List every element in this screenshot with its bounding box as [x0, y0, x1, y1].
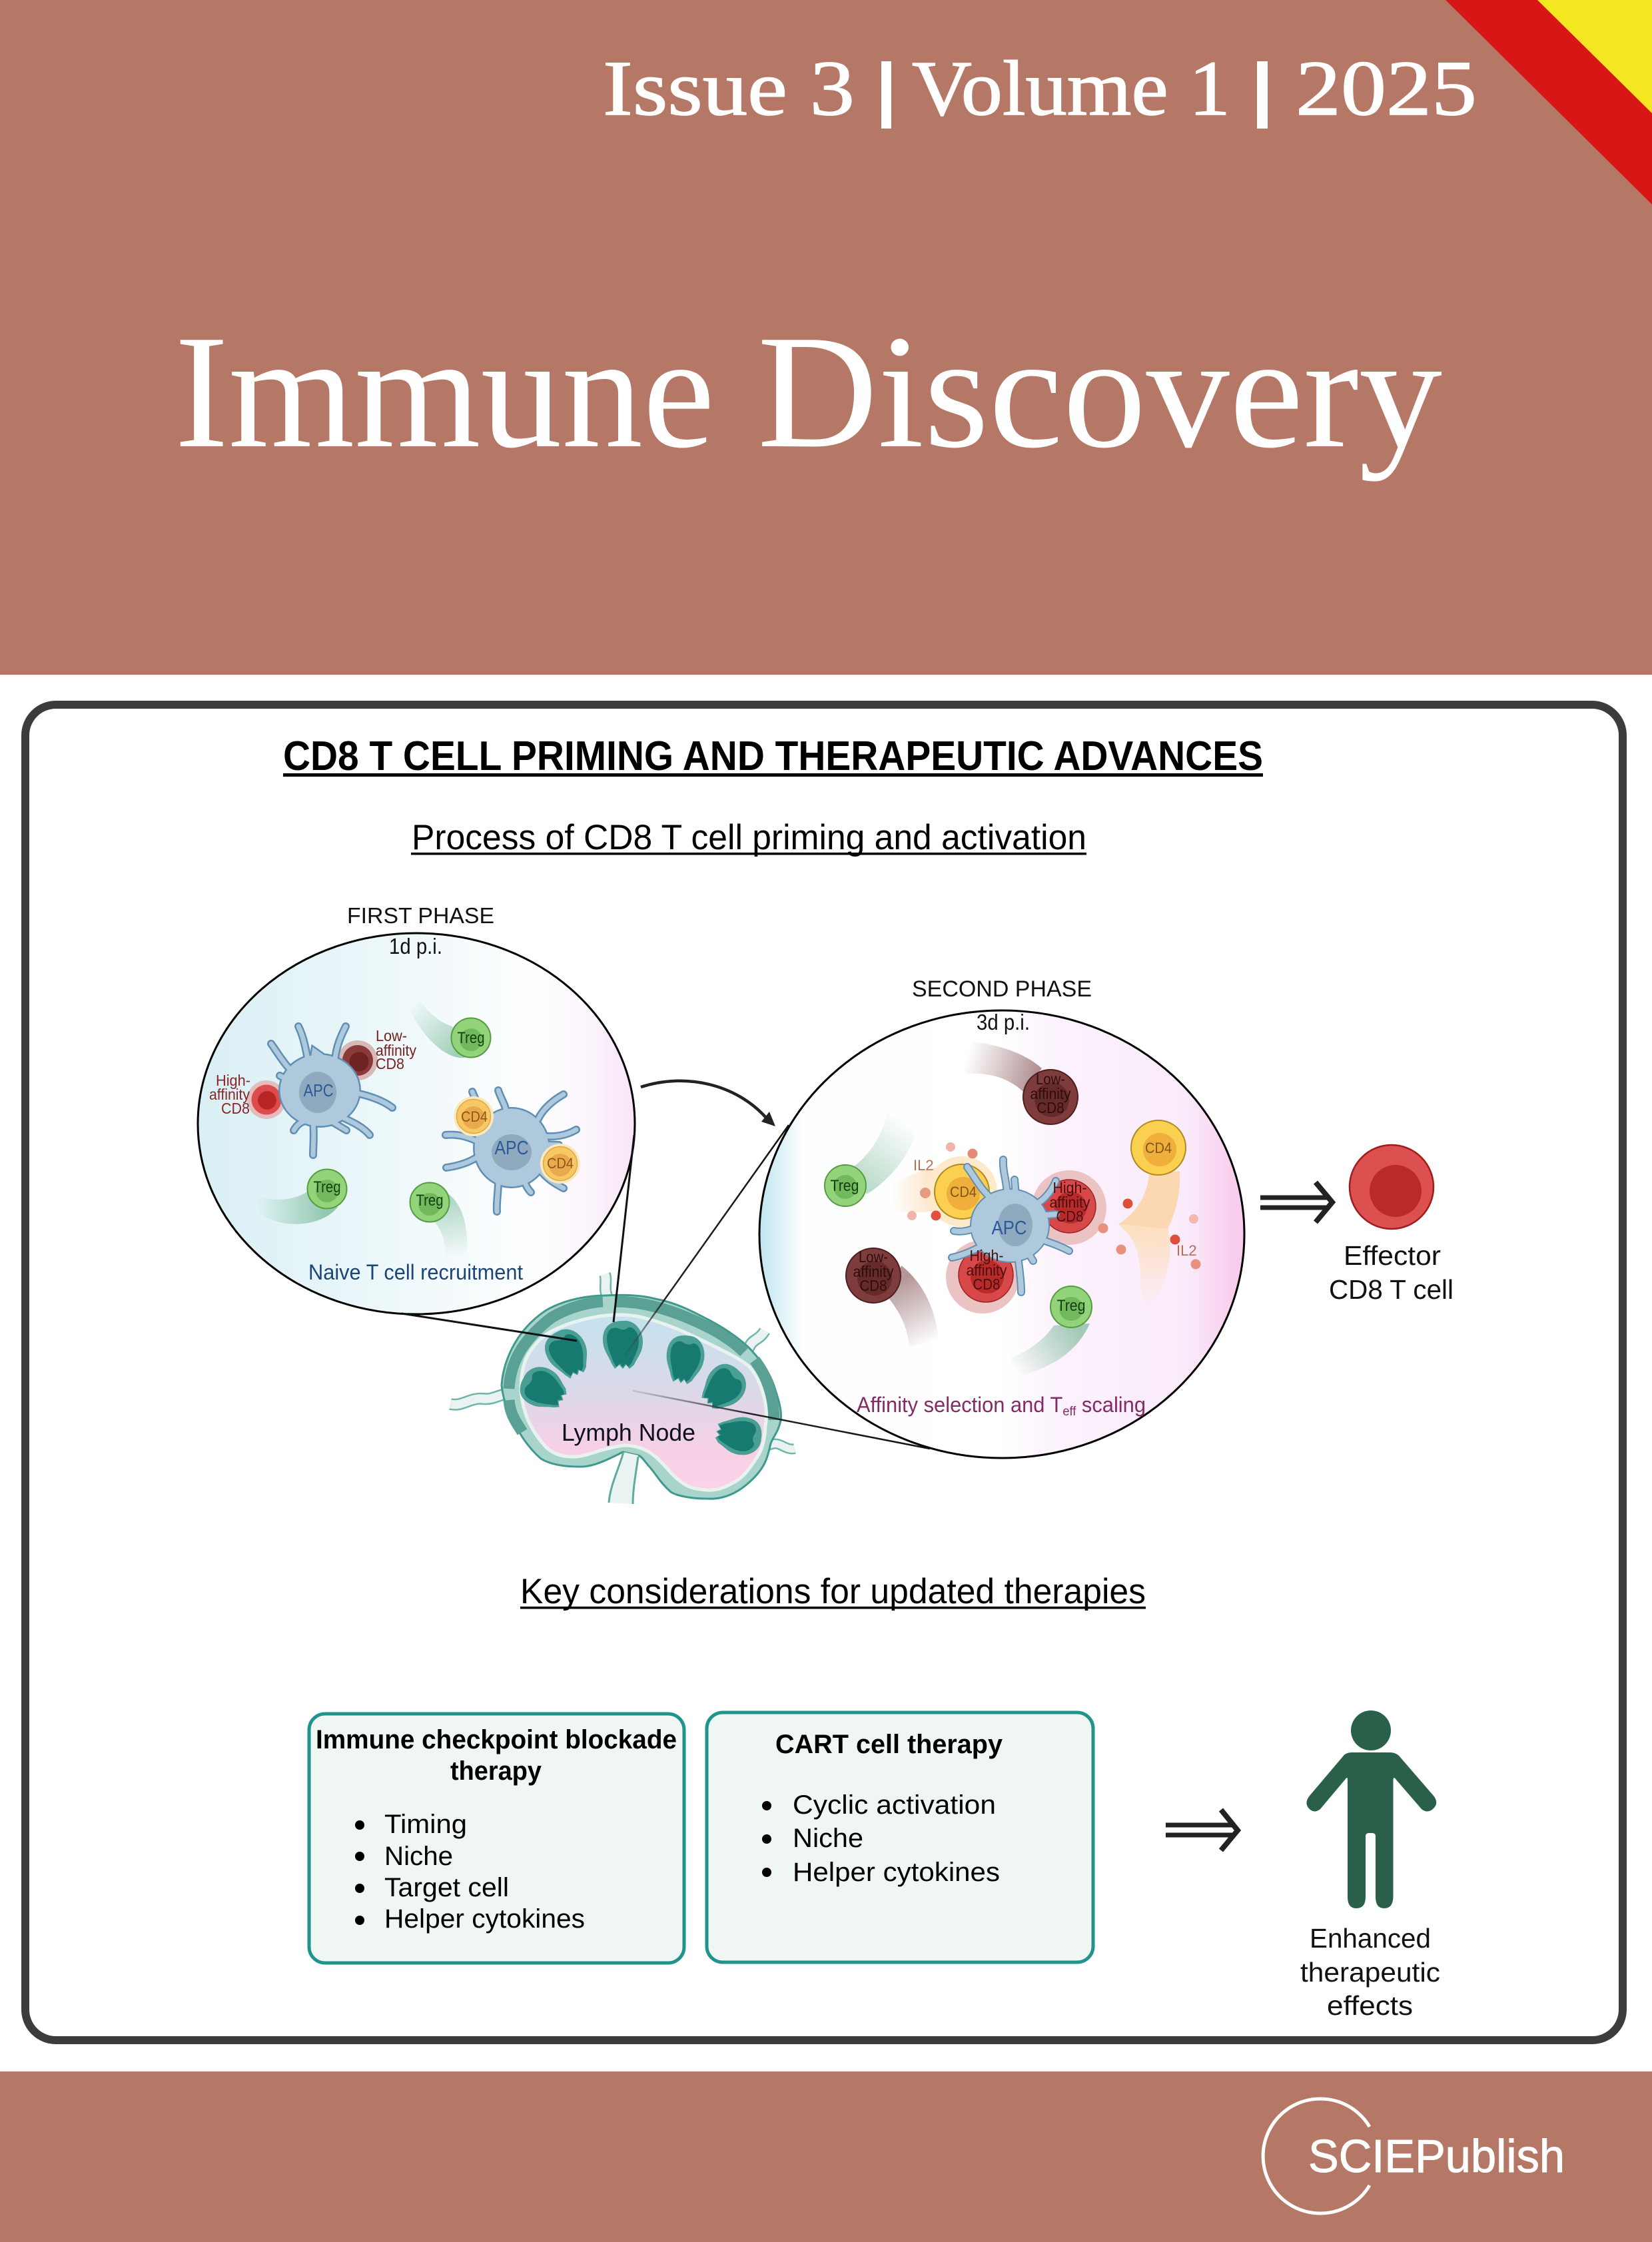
IL2 labels: IL2 — [1176, 1242, 1197, 1259]
second phase caption: scaling — [1076, 1393, 1146, 1417]
Treg cell with tail, lower centre — [410, 1183, 467, 1258]
low-affinity CD8 left: affinity — [853, 1263, 894, 1280]
APC left — [271, 1026, 392, 1155]
lymph node label: Lymph Node — [562, 1419, 695, 1446]
APC right with CD4 cells: CD4 — [461, 1108, 488, 1125]
second phase caption: eff — [1062, 1405, 1076, 1419]
issue line — [603, 45, 1477, 132]
lymph node — [450, 1274, 795, 1504]
APC right with CD4 cells: APC — [494, 1138, 529, 1159]
second phase caption: Affinity selection and T — [857, 1393, 1070, 1417]
journal title: Immune — [175, 302, 715, 482]
low-affinity label: CD8 — [376, 1055, 404, 1072]
bullet list: Target cell — [384, 1873, 509, 1902]
CD4 centre — [891, 1156, 997, 1227]
high-affinity CD8 cell — [247, 1080, 286, 1119]
IL2 labels — [913, 1157, 1197, 1259]
bullet list — [762, 1790, 1000, 1887]
high-affinity labels: High- — [1052, 1179, 1087, 1196]
capsule band — [509, 1302, 774, 1432]
medulla — [521, 1315, 766, 1490]
high-affinity label: CD8 — [221, 1100, 250, 1117]
Treg cell with tail, lower left — [255, 1170, 346, 1224]
bullet list: Niche — [793, 1824, 863, 1853]
low-affinity CD8 top — [964, 1042, 1078, 1124]
APC right with CD4 cells — [446, 1090, 580, 1212]
hilum — [609, 1452, 638, 1504]
second phase label: SECOND PHASE — [912, 976, 1092, 1002]
header band — [0, 0, 1652, 675]
high-affinity labels: CD8 — [1056, 1208, 1083, 1225]
Treg left: Treg — [830, 1177, 859, 1195]
second phase circle — [759, 976, 1244, 1458]
main heading: CD8 T CELL PRIMING AND THERAPEUTIC ADVANCES — [283, 733, 1263, 779]
footer band — [0, 2071, 1652, 2242]
bullet list: Cyclic activation — [793, 1790, 996, 1820]
lymphatic vessels — [450, 1274, 795, 1449]
follicles — [514, 1321, 765, 1458]
low-affinity label: affinity — [376, 1042, 416, 1059]
CD4 right with secretion cone: CD4 — [1145, 1140, 1172, 1156]
icon: patient figure — [1306, 1710, 1436, 1908]
effector label — [1329, 1240, 1453, 1305]
time label: 1d p.i. — [389, 934, 442, 958]
box heading: therapy — [450, 1756, 542, 1786]
time label: 3d p.i. — [977, 1010, 1030, 1034]
issue line: Volume 1 — [912, 45, 1230, 132]
node outline — [502, 1295, 781, 1499]
high-affinity label — [209, 1072, 250, 1117]
low-affinity CD8 top: CD8 — [1036, 1099, 1064, 1116]
APC right with CD4 cells: CD4 — [547, 1155, 574, 1172]
Treg cell with tail, top — [410, 1000, 490, 1058]
high-affinity label: High- — [216, 1072, 250, 1089]
effector label: Effector — [1344, 1240, 1441, 1271]
Treg right: Treg — [1056, 1297, 1086, 1315]
arrow to patient — [1166, 1810, 1238, 1850]
panel: immune checkpoint blockade therapy — [309, 1714, 684, 1963]
bullet list: Helper cytokines — [793, 1858, 1000, 1887]
panel: CART cell therapy — [707, 1712, 1093, 1962]
high-affinity labels: High- — [970, 1247, 1003, 1264]
high-affinity labels — [966, 1179, 1090, 1293]
main framed panel — [25, 705, 1623, 2040]
low-affinity CD8 top: Low- — [1036, 1070, 1065, 1088]
outcome label: effects — [1327, 1990, 1413, 2021]
bullet list: Timing — [384, 1810, 467, 1839]
subheading: therapies: Key considerations for updated therapies — [520, 1572, 1146, 1611]
corner ribbon — [1446, 0, 1652, 204]
box heading: CART cell therapy — [775, 1730, 1003, 1759]
APC left: APC — [304, 1080, 333, 1100]
low-affinity label — [376, 1027, 416, 1072]
first phase label: FIRST PHASE — [347, 904, 494, 929]
box heading — [316, 1725, 677, 1786]
publisher logo: SCIEPublish — [1308, 2130, 1565, 2182]
Treg right — [1010, 1286, 1092, 1377]
low-affinity label: Low- — [376, 1027, 407, 1044]
IL2 labels: IL2 — [913, 1157, 934, 1174]
outcome label — [1300, 1923, 1440, 2021]
low-affinity CD8 left: Low- — [859, 1248, 888, 1266]
subheading: priming process: Process of CD8 T cell priming and activation — [412, 818, 1086, 857]
APC centre — [952, 1160, 1069, 1292]
publisher logo — [1263, 2099, 1565, 2213]
first phase caption: Naive T cell recruitment — [308, 1260, 523, 1284]
issue line: 2025 — [1296, 45, 1477, 132]
low-affinity CD8 left — [846, 1248, 939, 1347]
high-affinity CD8 bottom — [946, 1240, 1019, 1313]
curved arrow between phases — [641, 1081, 775, 1126]
outcome label: therapeutic — [1300, 1957, 1440, 1988]
high-affinity labels: affinity — [966, 1262, 1007, 1279]
CD4 centre: CD4 — [950, 1184, 977, 1200]
high-affinity labels: CD8 — [973, 1276, 1001, 1293]
Treg left — [825, 1112, 917, 1206]
zoom lines — [402, 1125, 930, 1449]
cytokine dots — [907, 1142, 1200, 1270]
first phase circle — [198, 904, 635, 1314]
effector CD8 T cell — [1329, 1145, 1453, 1305]
APC centre: APC — [991, 1218, 1027, 1239]
Treg cell with tail, lower left: Treg — [313, 1178, 341, 1196]
effector label: CD8 T cell — [1329, 1274, 1453, 1305]
bullet list: Helper cytokines — [384, 1904, 585, 1934]
high-affinity labels: affinity — [1050, 1194, 1090, 1211]
low-affinity CD8 top: affinity — [1030, 1085, 1071, 1102]
journal title: Discovery — [757, 302, 1442, 482]
box heading: Immune checkpoint blockade — [316, 1725, 677, 1754]
low-affinity CD8 left: CD8 — [859, 1277, 887, 1294]
outcome label: Enhanced — [1310, 1923, 1431, 1954]
arrow to effector cell — [1260, 1182, 1332, 1222]
issue line: Issue 3 — [603, 45, 855, 132]
Treg cell with tail, lower centre: Treg — [416, 1192, 444, 1210]
journal title — [175, 302, 1442, 482]
Treg cell with tail, top: Treg — [457, 1029, 485, 1047]
bullet list — [355, 1810, 585, 1934]
high-affinity CD8 right — [1032, 1170, 1106, 1245]
high-affinity label: affinity — [209, 1086, 250, 1103]
low-affinity CD8 cell — [338, 1040, 378, 1080]
CD4 right with secretion cone — [1118, 1120, 1186, 1311]
bullet list: Niche — [384, 1842, 453, 1871]
